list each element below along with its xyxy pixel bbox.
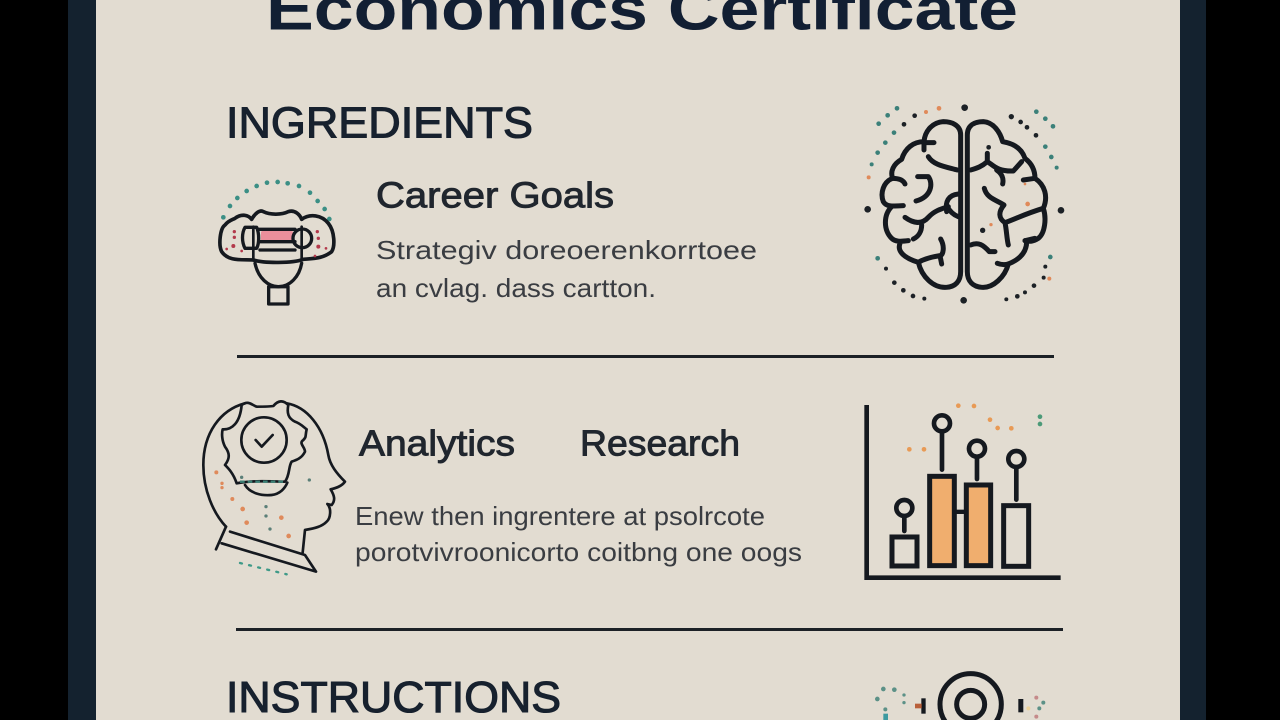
icon: bar chart: [867, 403, 1061, 578]
icon: VR headset: [220, 180, 334, 304]
icon: brain: [864, 104, 1064, 304]
bars: [892, 476, 1029, 566]
icon: target: [875, 674, 1045, 720]
divider two: [236, 628, 1063, 631]
axes: [867, 405, 1061, 578]
icon: head with gear: [203, 401, 345, 574]
body line 2: porotvivroonicorto coitbng one oogs: [355, 537, 802, 567]
subheading: career goals: Career Goals: [376, 174, 614, 216]
text block: analytics and research: [355, 422, 802, 567]
lollipop markers: [896, 415, 1024, 531]
divider one: [237, 355, 1054, 358]
body line 1: Strategiv doreoerenkorrtoee: [376, 235, 757, 265]
subheading: research: Research: [580, 422, 740, 464]
heading: ingredients: INGREDIENTS: [226, 98, 533, 148]
body line 2: an cvlag. dass cartton.: [376, 273, 656, 303]
body line 1: Enew then ingrentere at psolrcote: [355, 501, 765, 531]
text block: career goals: [376, 174, 757, 303]
subheading: analytics: Analytics: [359, 422, 515, 464]
